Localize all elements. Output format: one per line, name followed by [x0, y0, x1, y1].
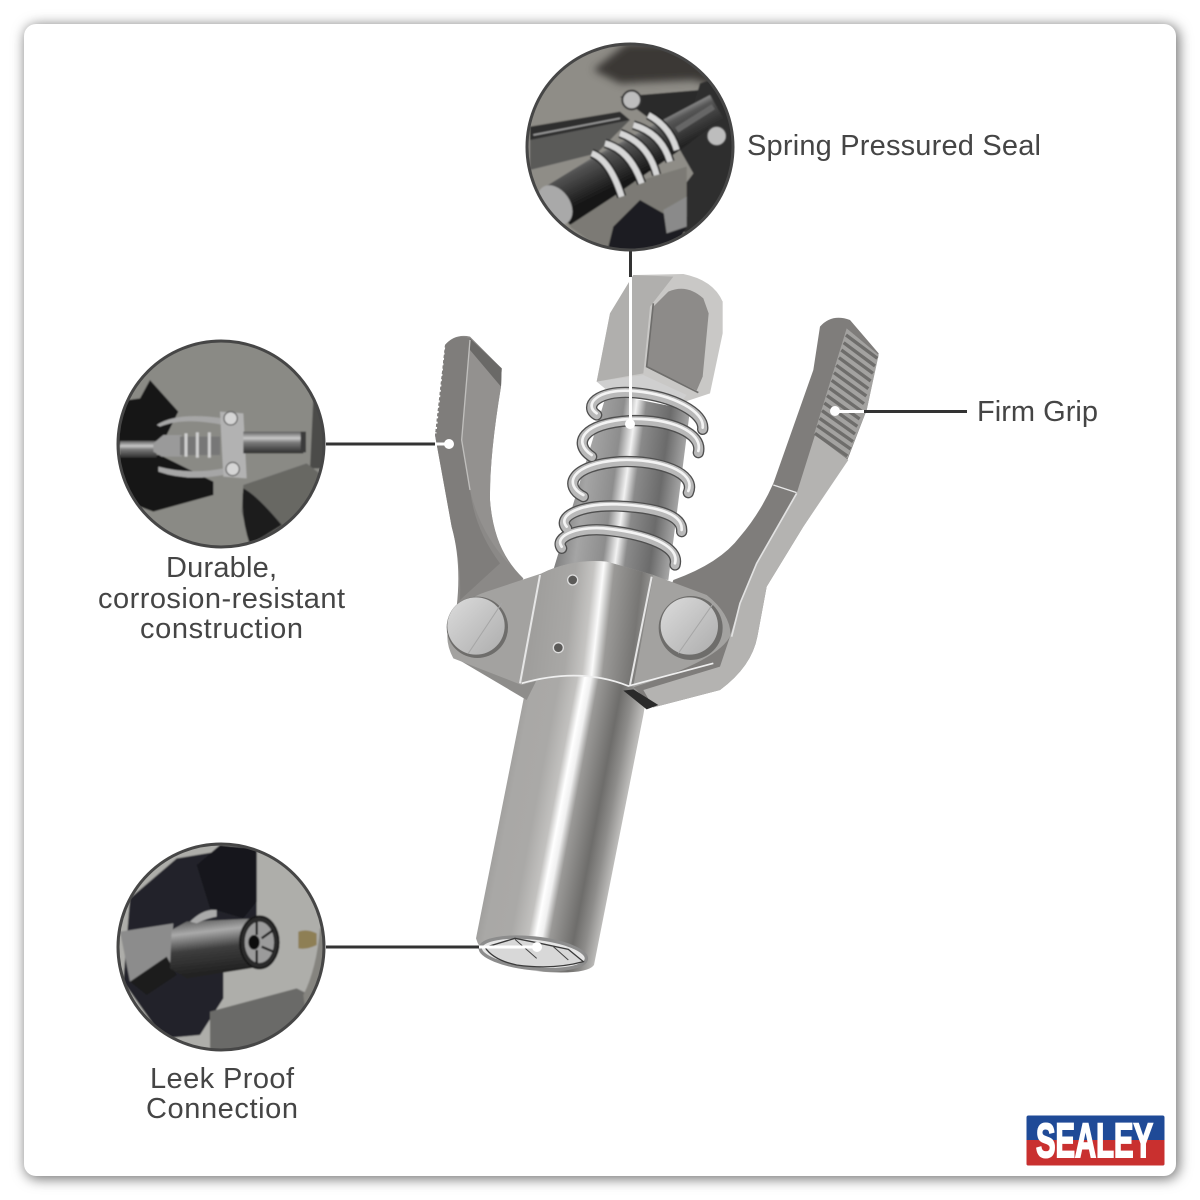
right jaw	[633, 318, 879, 707]
grip ribs	[814, 328, 879, 458]
collar with wings	[447, 561, 731, 709]
label: durable construction: Durable,	[166, 552, 277, 584]
label: leek proof connection: Leek Proof	[150, 1063, 295, 1095]
product: grease coupler photo	[435, 274, 879, 974]
callout line: leak proof connection	[326, 942, 542, 952]
barrel	[476, 653, 649, 974]
label: durable construction	[98, 552, 345, 645]
label: durable construction: corrosion-resistant	[98, 583, 345, 615]
label: firm grip: Firm Grip	[977, 396, 1098, 428]
inset photo: nozzle and nipple	[110, 835, 330, 1055]
spring coils	[560, 391, 703, 565]
label: leek proof connection	[146, 1063, 298, 1125]
label: leek proof connection: Connection	[146, 1093, 298, 1125]
left jaw	[435, 336, 523, 637]
shaft	[553, 393, 690, 580]
label: spring pressured seal: Spring Pressured Seal	[747, 130, 1041, 162]
hex nut	[597, 274, 723, 403]
inset photo: spring detail	[520, 40, 740, 260]
upper tool	[435, 274, 879, 709]
callout line: durable construction	[326, 439, 454, 449]
callout line: spring pressured seal	[625, 250, 635, 429]
inset photo: full tool held in glove	[110, 335, 330, 555]
rivets	[447, 596, 723, 660]
callout line: firm grip	[830, 406, 967, 416]
label: durable construction: construction	[140, 613, 303, 645]
